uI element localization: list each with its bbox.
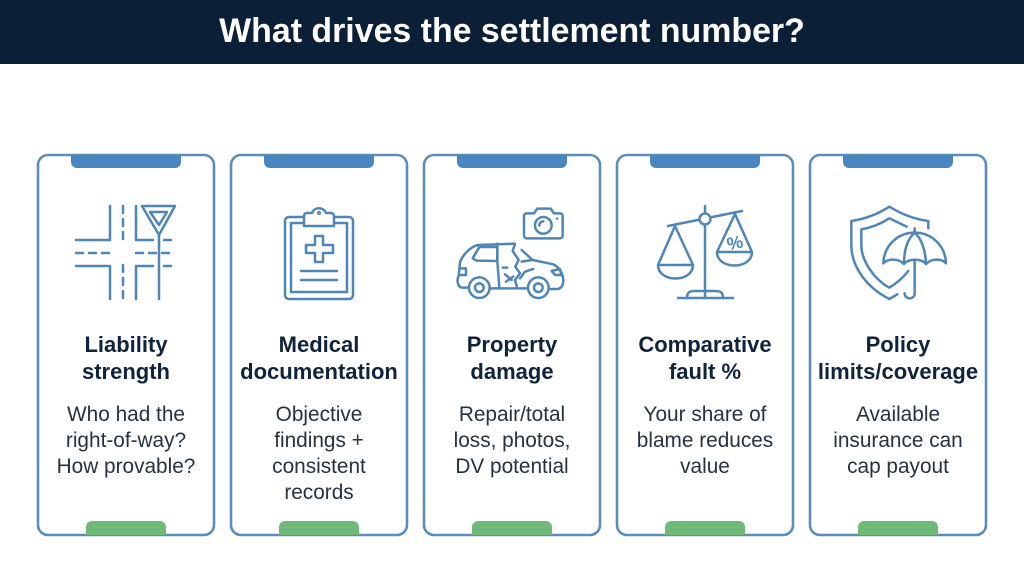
icon: scales with percent [658,206,752,298]
camera [524,209,563,238]
description: medical documentation: records [284,481,354,504]
heading: policy limits: limits/coverage [818,359,978,384]
panel: comparative fault [617,155,793,535]
heading: policy limits: Policy [866,332,931,357]
icon: medical clipboard [285,208,353,299]
damaged car [458,244,563,298]
heading: liability strength: strength [82,359,170,384]
description: property damage: DV potential [455,455,569,478]
icon: percent symbol: % [725,232,745,254]
description: property damage: Repair/total [459,403,565,426]
icon: intersection with yield sign [76,206,175,299]
description: medical documentation: Objective [276,403,362,426]
heading: medical documentation: Medical [279,332,359,357]
description: liability strength: How provable? [57,455,195,478]
description: liability strength: right-of-way? [66,429,186,452]
heading: comparative fault: fault % [669,359,741,384]
icon: damaged car and camera [458,209,563,298]
description: policy limits: Available [856,403,940,426]
heading: comparative fault: Comparative [638,332,772,357]
description: policy limits: insurance can [833,429,963,452]
icon: shield and umbrella [851,207,946,299]
description: comparative fault: blame reduces [637,429,773,452]
description: comparative fault: Your share of [644,403,767,426]
heading: property damage: damage [470,359,554,384]
title: What drives the settlement number? [219,12,805,50]
heading: medical documentation: documentation [240,359,398,384]
description: liability strength: Who had the [67,403,185,426]
description: medical documentation: findings + [274,429,364,452]
description: comparative fault: value [680,455,730,478]
description: policy limits: cap payout [847,455,949,478]
panel: property damage [424,155,600,535]
heading: liability strength: Liability [84,332,168,357]
description: medical documentation: consistent [272,455,366,478]
panel: medical documentation [231,155,407,535]
description: property damage: loss, photos, [454,429,570,452]
panel: policy limits [810,155,986,535]
heading: property damage: Property [467,332,558,357]
panel: liability strength [38,155,214,535]
header band [0,0,1024,64]
